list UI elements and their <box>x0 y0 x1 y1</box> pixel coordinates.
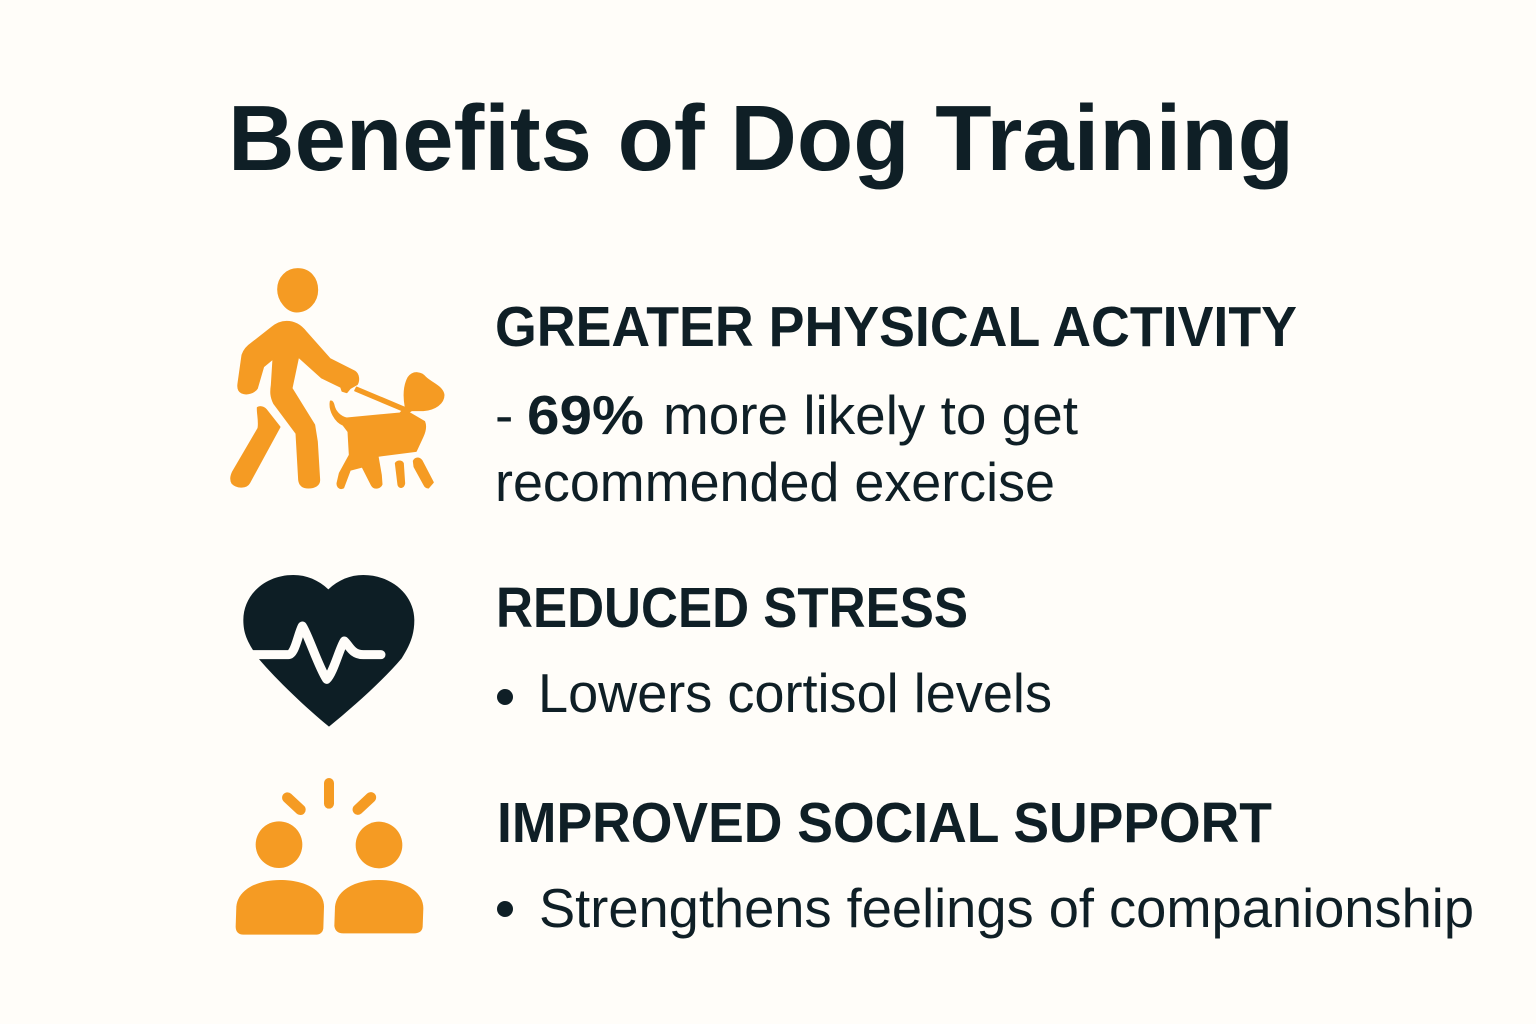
icon: heart with pulse <box>243 575 414 727</box>
text: exercise statistic: - <box>495 384 513 446</box>
text: exercise statistic: 69% <box>527 384 644 446</box>
text: strengthens companionship: Strengthens feelings of companionship <box>539 877 1474 939</box>
title: Benefits of Dog Training <box>228 86 1294 190</box>
icon: person walking dog <box>231 269 444 488</box>
heading: greater physical activity: GREATER PHYSICAL ACTIVITY <box>495 295 1297 359</box>
text: exercise statistic <box>495 384 1078 513</box>
text: exercise statistic: recommended exercise <box>495 451 1055 513</box>
text: lowers cortisol: Lowers cortisol levels <box>538 662 1052 724</box>
text: exercise statistic: more likely to get <box>663 384 1078 446</box>
heading: reduced stress: REDUCED STRESS <box>496 576 968 640</box>
icon: two people with spark <box>236 778 423 935</box>
heading: improved social support: IMPROVED SOCIAL SUPPORT <box>497 791 1272 855</box>
